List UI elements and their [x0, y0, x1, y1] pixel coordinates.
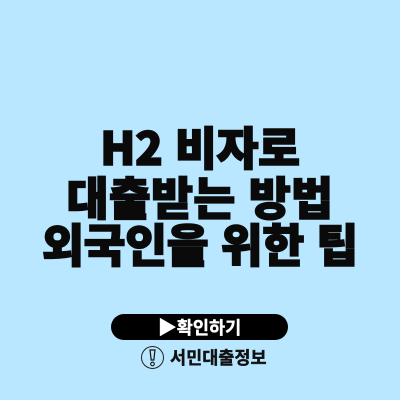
title: H2 비자로	[100, 113, 300, 179]
button: confirm: ▶확인하기	[158, 313, 241, 340]
title: 대출받는 방법	[67, 163, 333, 229]
title	[42, 113, 358, 276]
button: confirm	[111, 314, 288, 340]
brand name: 서민대출정보	[170, 345, 267, 370]
title: 외국인을 위한 팁	[42, 210, 358, 276]
icon: exclamation circle	[141, 346, 164, 369]
